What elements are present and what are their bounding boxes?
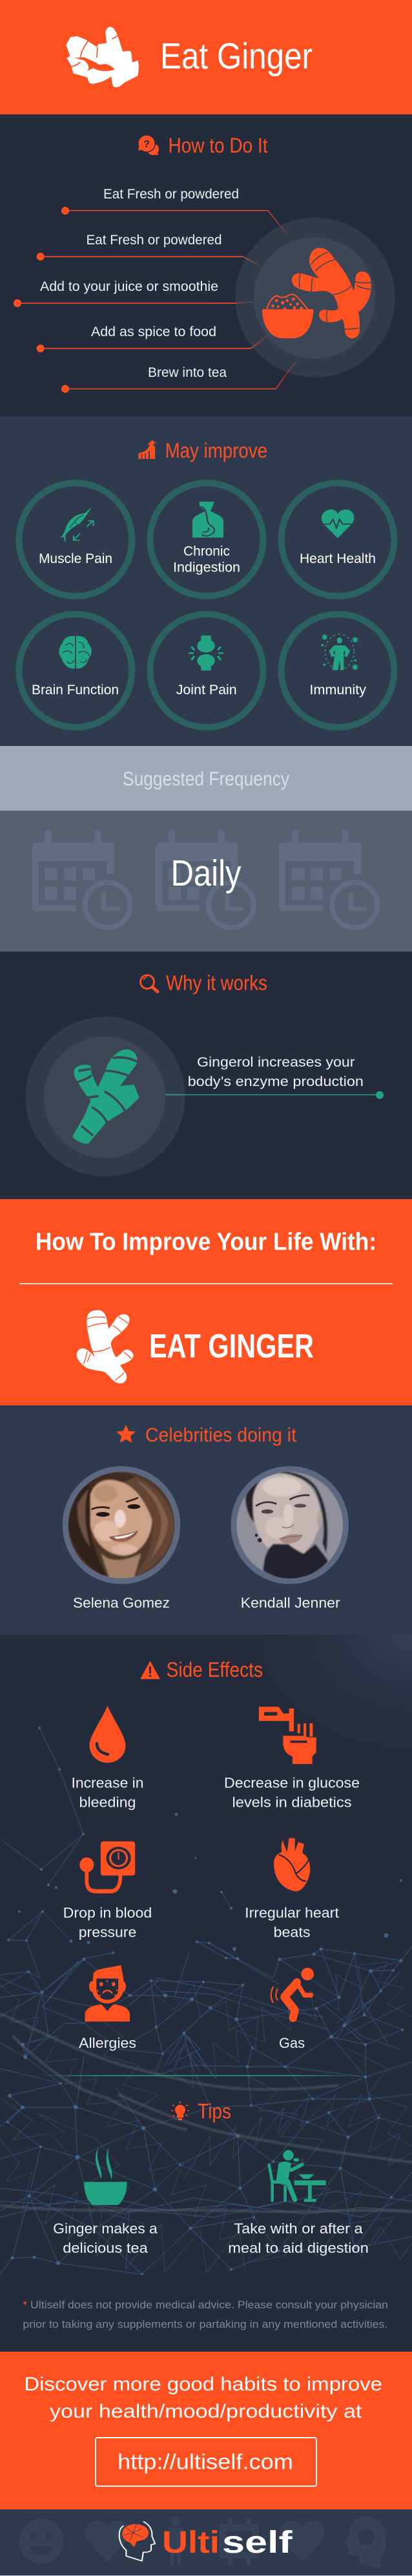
ring: joint pain <box>150 614 263 727</box>
item: blood pressure <box>63 1842 152 1941</box>
label: Allergies <box>79 2035 136 2051</box>
item: gas <box>271 1968 314 2051</box>
label <box>63 1905 152 1941</box>
heading: how to do it: How to Do It <box>168 134 268 157</box>
url box: http://ultiself.com <box>118 2450 293 2474</box>
heading: how to improve: How To Improve Your Life With: <box>36 1229 376 1256</box>
label: levels in diabetics <box>232 1794 351 1810</box>
ring: muscle pain <box>19 483 132 596</box>
label <box>71 1775 143 1810</box>
label <box>53 2220 158 2256</box>
icon: ginger and bowl <box>262 248 371 339</box>
panel: daily <box>0 811 412 952</box>
list item 2: Eat Fresh or powdered <box>87 232 222 248</box>
label: Drop in blood <box>63 1905 152 1921</box>
icon: heart pulse <box>321 509 355 538</box>
icon: ginger root white <box>66 27 139 87</box>
callout: gingerol: body’s enzyme production <box>188 1074 364 1089</box>
icon: light bulb <box>171 2102 189 2120</box>
label: meal to aid digestion <box>228 2240 369 2256</box>
list item 4 <box>37 324 267 352</box>
label: Gas <box>279 2035 305 2051</box>
label: Take with or after a <box>234 2220 364 2237</box>
disclaimer: * <box>23 2299 27 2311</box>
icon: blood pressure cuff <box>79 1842 135 1891</box>
icon: brain <box>59 636 92 668</box>
heading: why it works: Why it works <box>166 971 267 994</box>
disclaimer: Ultiself does not provide medical advice. Please consult your physician <box>30 2299 388 2311</box>
panel: suggested frequency <box>0 746 412 811</box>
icon: question bubbles: ? <box>143 139 150 150</box>
label: Joint Pain <box>176 682 237 697</box>
photo: kendall jenner <box>231 1466 349 1584</box>
heading: may improve: May improve <box>165 439 267 462</box>
label: Chronic <box>183 543 230 559</box>
item: bleeding <box>71 1705 143 1810</box>
label: Brain Function <box>32 682 119 697</box>
icon: question bubbles <box>138 134 159 155</box>
list item 2 <box>37 232 260 266</box>
heading: celebrities: Celebrities doing it <box>145 1423 296 1446</box>
item: heart beats <box>245 1838 340 1941</box>
label: beats <box>274 1924 310 1941</box>
name: selena gomez: Selena Gomez <box>73 1595 170 1611</box>
heading: eat ginger: EAT GINGER <box>149 1328 314 1365</box>
icon: green ginger <box>72 1049 139 1144</box>
list item 1: Eat Fresh or powdered <box>103 186 239 202</box>
icon: gas figure <box>271 1968 314 2017</box>
disclaimer: prior to taking any supplements or partaking in any mentioned activities. <box>23 2318 387 2330</box>
panel: footer <box>0 2509 412 2576</box>
label: Decrease in glucose <box>224 1775 360 1791</box>
label: Muscle Pain <box>39 551 112 566</box>
icon: brain head <box>119 2522 155 2561</box>
url box <box>96 2438 316 2486</box>
label: Ginger makes a <box>53 2220 158 2237</box>
icon: blood drop <box>89 1705 125 1763</box>
disclaimer <box>23 2299 388 2330</box>
panel: how to do it <box>0 114 412 416</box>
icon: magnifier <box>141 975 158 992</box>
ring: brain function <box>19 614 132 727</box>
icon: calendar 3 <box>279 830 377 928</box>
panel: how to improve your life <box>0 1199 412 1405</box>
callout: gingerol <box>165 1054 384 1099</box>
icon: stomach torso <box>192 502 223 538</box>
panel: may improve <box>0 416 412 746</box>
icon: anatomical heart <box>274 1838 310 1891</box>
graphic: concentric circles <box>26 1017 185 1176</box>
item: tea <box>53 2147 158 2256</box>
label: Heart Health <box>300 551 376 566</box>
icon: growth chart <box>138 440 157 459</box>
label: Increase in <box>71 1775 143 1791</box>
icon: muscle <box>60 507 93 541</box>
ring: immunity <box>282 614 394 727</box>
list item 5: Brew into tea <box>148 365 227 380</box>
list item 5 <box>61 361 296 393</box>
label <box>173 543 240 575</box>
name: kendall jenner: Kendall Jenner <box>241 1595 340 1611</box>
graphic: concentric circles <box>235 218 395 378</box>
panel: why it works <box>0 952 412 1199</box>
panel: tips <box>53 2100 369 2256</box>
icon: tea bowl <box>84 2147 127 2205</box>
label: pressure <box>79 1924 136 1941</box>
label: Indigestion <box>173 559 240 575</box>
label: Irregular heart <box>245 1905 340 1921</box>
ring: heart health <box>282 483 394 596</box>
list item 3: Add to your juice or smoothie <box>40 279 218 294</box>
heading: side effects: Side Effects <box>167 1658 263 1681</box>
item: allergies <box>79 1965 136 2051</box>
cta text: Discover more good habits to improve <box>24 2374 382 2395</box>
frequency value: Daily <box>170 853 242 894</box>
panel: header <box>0 0 412 114</box>
icon: joint <box>190 635 222 670</box>
panel: celebrities <box>0 1405 412 1635</box>
heading: tips: Tips <box>198 2100 231 2123</box>
panel: side effects <box>63 1658 360 2051</box>
wordmark <box>162 2526 293 2560</box>
list item 4: Add as spice to food <box>91 324 216 339</box>
label <box>228 2220 369 2256</box>
logo: ultiself <box>119 2522 293 2561</box>
list item 3 <box>14 279 254 307</box>
panel: side effects and tips background <box>0 1635 412 2352</box>
icon: person eating <box>269 2150 326 2202</box>
icon: warning triangle <box>141 1661 160 1679</box>
label: delicious tea <box>63 2240 149 2256</box>
icon: ginger white <box>77 1310 134 1383</box>
title: Eat Ginger <box>160 36 313 77</box>
panel: call to action <box>0 2352 412 2509</box>
wordmark: Ulti <box>162 2526 220 2560</box>
item: meal <box>228 2150 369 2256</box>
ring: chronic indigestion <box>150 483 263 596</box>
item: glucose <box>224 1707 360 1810</box>
background icons <box>19 2517 386 2568</box>
icon: star <box>116 1425 136 1443</box>
icon: calendar 1 <box>32 830 130 928</box>
list item 1 <box>61 186 288 235</box>
label: bleeding <box>79 1794 136 1810</box>
icon: allergy face <box>85 1965 130 2021</box>
cta text <box>24 2374 382 2422</box>
heading: suggested frequency: Suggested Frequency <box>123 767 289 790</box>
label: Immunity <box>309 682 366 697</box>
icon: glucometer <box>259 1707 316 1764</box>
icon: immunity figure <box>321 634 358 670</box>
wordmark: self <box>222 2526 293 2560</box>
label <box>224 1775 360 1810</box>
label <box>245 1905 340 1941</box>
icon: calendar 2 <box>156 830 254 928</box>
callout: gingerol: Gingerol increases your <box>197 1054 355 1070</box>
cta text: your health/mood/productivity at <box>50 2401 362 2422</box>
photo: selena gomez <box>63 1466 180 1584</box>
